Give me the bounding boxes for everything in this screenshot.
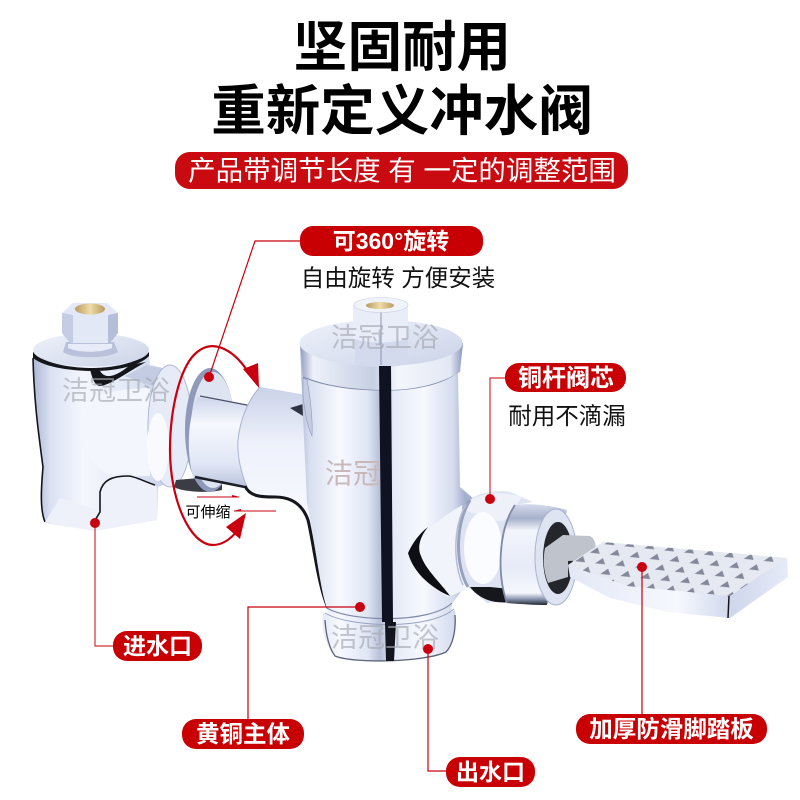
callout: brass body: 黄铜主体: [196, 721, 290, 747]
valve illustration: [33, 298, 788, 661]
pedal stem: [544, 535, 596, 583]
right valve neck: [408, 505, 465, 597]
callout: brass core: 铜杆阀芯: [518, 365, 614, 392]
brand watermarks: [62, 323, 439, 653]
title: [211, 17, 593, 142]
right valve bulb: [456, 491, 533, 603]
left inlet body: [33, 355, 180, 531]
callout: brass core: [485, 363, 626, 504]
callout: water outlet: 出水口: [456, 759, 525, 785]
centre stripe: [379, 366, 393, 622]
callout: water outlet: [423, 644, 535, 787]
callout: brass body: [182, 602, 365, 749]
union ring: [147, 365, 222, 492]
telescoping label: 可伸缩: [185, 504, 231, 521]
callout: pedal: [576, 562, 767, 744]
rotation arrow: [170, 346, 259, 545]
main cap: [300, 298, 463, 390]
brand watermarks: 洁冠卫浴: [331, 623, 439, 653]
brand watermarks: 洁冠: [325, 458, 381, 489]
callout: rotate 360: 自由旋转 方便安装: [301, 265, 495, 291]
callout: rotate 360: 可360°旋转: [333, 228, 449, 254]
subtitle banner: 产品带调节长度 有 一定的调整范围: [188, 155, 616, 186]
main body: [300, 345, 475, 625]
callout: brass core: 耐用不滴漏: [508, 403, 626, 429]
inlet top flange: [33, 334, 149, 386]
callout: water inlet: 进水口: [123, 633, 192, 659]
telescoping label: [185, 495, 276, 521]
callout: pedal: 加厚防滑脚踏板: [589, 716, 754, 742]
title: 坚固耐用: [293, 17, 511, 78]
callout: water inlet: [90, 518, 202, 661]
title: 重新定义冲水阀: [211, 81, 593, 142]
inlet hex nut: [62, 303, 118, 357]
brand watermarks: 洁冠卫浴: [331, 323, 439, 353]
brand watermarks: 洁冠卫浴: [62, 376, 170, 406]
right valve sleeve: [501, 504, 577, 605]
foot pedal: [568, 542, 788, 618]
bottom cup: [323, 603, 456, 661]
inner ring: [185, 368, 235, 492]
callout: rotate 360: [204, 226, 495, 382]
sleeve into main body: [238, 387, 330, 610]
telescoping pipe: [189, 397, 255, 487]
